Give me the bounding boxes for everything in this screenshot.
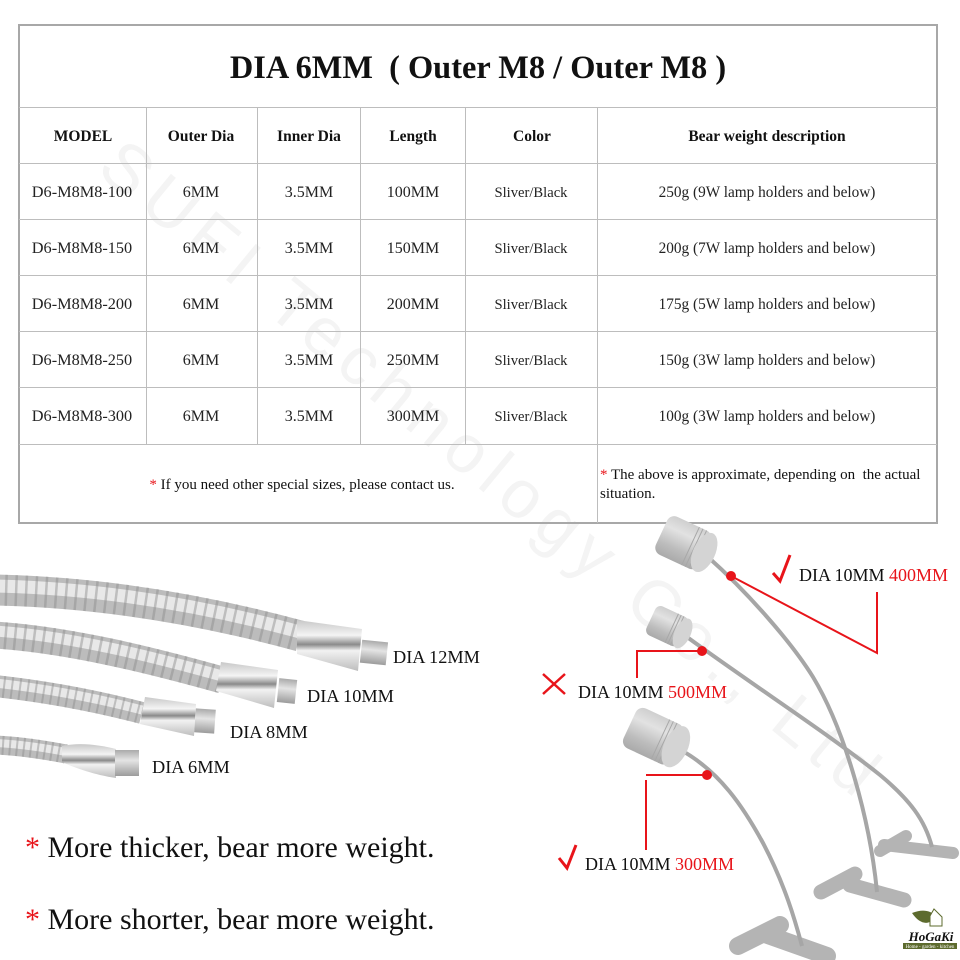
table header row xyxy=(54,128,846,145)
row 300MM: Sliver/Black xyxy=(495,409,568,425)
table header row: Color xyxy=(513,128,551,145)
row 250MM: 3.5MM xyxy=(285,352,333,369)
row 250MM: 150g (3W lamp holders and below) xyxy=(659,352,875,369)
callout 500MM: DIA 10MM 500MM xyxy=(578,682,727,702)
row 250MM xyxy=(32,350,875,369)
table header row: MODEL xyxy=(54,128,112,145)
row 100MM: 3.5MM xyxy=(285,184,333,201)
watermark: SUFI Technology Co., Ltd xyxy=(85,125,894,810)
row 200MM: Sliver/Black xyxy=(495,297,568,313)
row 100MM xyxy=(32,182,875,201)
logo: HoGaKi: Home - garden - kitchen xyxy=(906,945,955,950)
row 300MM: 6MM xyxy=(183,408,219,425)
row 100MM: Sliver/Black xyxy=(495,185,568,201)
statement: shorter: * More shorter, bear more weight. xyxy=(25,903,434,936)
table grid xyxy=(19,25,937,523)
label DIA 8MM: DIA 8MM xyxy=(230,722,308,742)
row 200MM: 6MM xyxy=(183,296,219,313)
specification table xyxy=(19,25,937,523)
logo: HoGaKi: HoGaKi xyxy=(908,929,954,944)
footnote: special sizes: * If you need other special sizes, please contact us. xyxy=(149,477,455,493)
row 100MM: D6-M8M8-100 xyxy=(32,182,132,201)
table header row: Bear weight description xyxy=(688,128,846,145)
logo: HoGaKi xyxy=(903,909,957,950)
label DIA 6MM: DIA 6MM xyxy=(152,757,230,777)
row 100MM: 250g (9W lamp holders and below) xyxy=(659,184,875,201)
table header row: Length xyxy=(389,128,437,145)
tube 6MM xyxy=(0,743,139,778)
row 300MM xyxy=(32,406,875,425)
row 200MM xyxy=(32,294,875,313)
footnote: approximate: * The above is approximate, depending on the actual xyxy=(600,467,920,483)
row 150MM: 150MM xyxy=(387,240,439,257)
label DIA 10MM: DIA 10MM xyxy=(307,686,394,706)
row 150MM: Sliver/Black xyxy=(495,241,568,257)
gooseneck tubes comparison xyxy=(0,586,480,778)
lamp 500MM xyxy=(644,604,953,853)
row 300MM: 300MM xyxy=(387,408,439,425)
row 100MM: 6MM xyxy=(183,184,219,201)
row 200MM: D6-M8M8-200 xyxy=(32,294,132,313)
row 150MM: 3.5MM xyxy=(285,240,333,257)
footnote: approximate: situation. xyxy=(600,486,655,502)
row 250MM: 6MM xyxy=(183,352,219,369)
row 100MM: 100MM xyxy=(387,184,439,201)
callout 400MM: DIA 10MM 400MM xyxy=(799,565,948,585)
row 200MM: 175g (5W lamp holders and below) xyxy=(659,296,875,313)
row 150MM: D6-M8M8-150 xyxy=(32,238,132,257)
callout 300MM xyxy=(559,770,734,874)
row 300MM: 100g (3W lamp holders and below) xyxy=(659,408,875,425)
lamp 300MM xyxy=(620,705,827,956)
table title: DIA 6MM ( Outer M8 / Outer M8 ) xyxy=(230,50,726,86)
row 250MM: Sliver/Black xyxy=(495,353,568,369)
tube 10MM xyxy=(0,631,297,708)
table header row: Outer Dia xyxy=(168,128,234,145)
callout 500MM xyxy=(543,646,727,702)
row 150MM: 6MM xyxy=(183,240,219,257)
row 250MM: D6-M8M8-250 xyxy=(32,350,132,369)
row 200MM: 200MM xyxy=(387,296,439,313)
callout 300MM: DIA 10MM 300MM xyxy=(585,854,734,874)
row 300MM: 3.5MM xyxy=(285,408,333,425)
statement: thicker: * More thicker, bear more weight. xyxy=(25,831,434,864)
row 200MM: 3.5MM xyxy=(285,296,333,313)
lamp length comparison xyxy=(543,514,953,956)
row 150MM xyxy=(32,238,875,257)
tube 12MM xyxy=(0,586,388,671)
lamp 400MM xyxy=(653,514,904,900)
table header row: Inner Dia xyxy=(277,128,341,145)
tube 8MM xyxy=(0,683,216,736)
row 250MM: 250MM xyxy=(387,352,439,369)
row 300MM: D6-M8M8-300 xyxy=(32,406,132,425)
callout 400MM xyxy=(726,555,948,653)
label DIA 12MM: DIA 12MM xyxy=(393,647,480,667)
row 150MM: 200g (7W lamp holders and below) xyxy=(659,240,875,257)
